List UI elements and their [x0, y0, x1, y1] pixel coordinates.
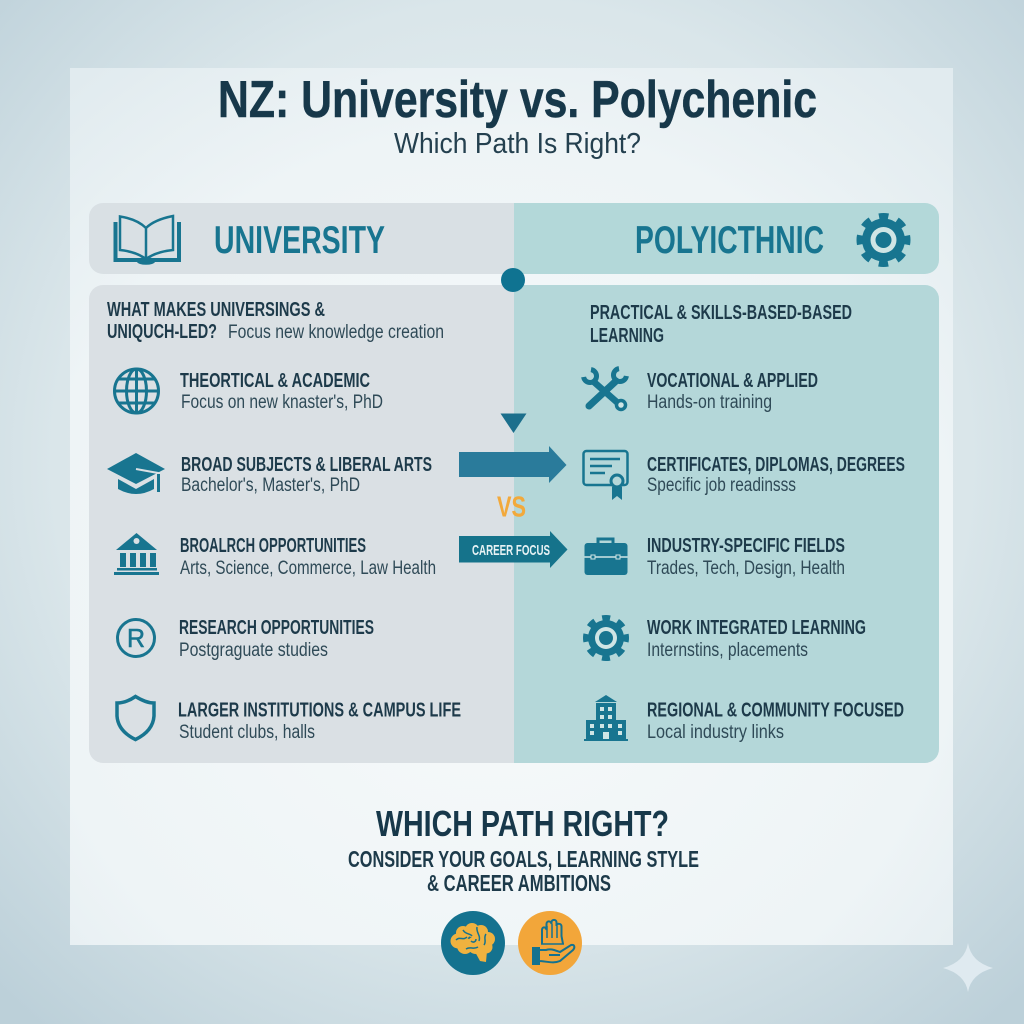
down triangle marker: [500, 414, 526, 433]
intro heading: university: WHAT MAKES UNIVERSINGS &: [107, 299, 325, 321]
closing text: CONSIDER YOUR GOALS, LEARNING STYLE: [348, 846, 699, 872]
item: industry fields: INDUSTRY-SPECIFIC FIELDS: [647, 535, 845, 557]
item: broad subjects: BROAD SUBJECTS & LIBERAL ARTS: [181, 454, 432, 476]
item: theoretical: [114, 369, 383, 413]
item: broad opportunities: [114, 533, 436, 579]
icon: globe: [114, 369, 158, 413]
item: vocational: Hands-on training: [647, 392, 772, 413]
item: broad subjects: Bachelor's, Master's, PhD: [181, 475, 360, 496]
intro heading: polytechnic: [590, 302, 852, 347]
closing text: [348, 846, 699, 896]
item: certificates: CERTIFICATES, DIPLOMAS, DEGREES: [647, 454, 905, 476]
icon: raised hand: [518, 911, 582, 975]
icon: shield: [117, 696, 154, 740]
closing text: & CAREER AMBITIONS: [427, 870, 611, 896]
item: regional: [584, 695, 904, 743]
closing heading: WHICH PATH RIGHT?: [376, 803, 669, 844]
item: broad opportunities: BROALRCH OPPORTUNITIES: [180, 535, 366, 557]
panel: university header: [89, 203, 514, 274]
item: vocational: [584, 369, 818, 413]
intro heading: polytechnic: LEARNING: [590, 325, 664, 347]
icon: graduation cap: [107, 453, 165, 494]
item: broad subjects: [107, 453, 432, 496]
vs label: VS: [497, 492, 526, 524]
icon: sparkle: [943, 943, 993, 992]
item: larger institutions: Student clubs, halls: [179, 722, 315, 743]
panel: polytechnic details: [514, 285, 939, 763]
icon: registered circle: [118, 620, 154, 656]
divider dot: [501, 268, 525, 292]
icon: registered circle: R: [127, 623, 145, 653]
heading: university: UNIVERSITY: [214, 219, 385, 262]
item: industry fields: [584, 535, 845, 579]
subtitle: Which Path Is Right?: [394, 128, 641, 160]
item: larger institutions: [117, 696, 461, 743]
icon: office building: [584, 695, 628, 741]
panel: university details: [89, 285, 514, 763]
item: vocational: VOCATIONAL & APPLIED: [647, 370, 818, 392]
item: regional: Local industry links: [647, 722, 784, 743]
item: certificates: [584, 451, 905, 500]
item: research: [118, 617, 374, 661]
icon: certificate: [584, 451, 628, 500]
intro heading: polytechnic: PRACTICAL & SKILLS-BASED-BASED: [590, 302, 852, 324]
icon: institution building: [114, 533, 159, 575]
item: regional: REGIONAL & COMMUNITY FOCUSED: [647, 700, 904, 722]
panel: polytechnic header: [514, 203, 939, 274]
intro heading: university: [107, 299, 444, 343]
item: theoretical: Focus on new knaster's, PhD: [181, 392, 383, 413]
item: research: RESEARCH OPPORTUNITIES: [179, 617, 374, 639]
icon: gear: [860, 216, 908, 264]
item: work integrated learning: WORK INTEGRATED LEARNING: [647, 617, 866, 639]
intro heading: university: UNIQUCH-LED?: [107, 321, 217, 343]
heading: polytechnic: POLYICTHNIC: [635, 219, 824, 262]
arrow: career focus: [459, 531, 568, 568]
icon: brain: [441, 911, 505, 975]
item: work integrated learning: [586, 617, 866, 661]
item: theoretical: THEORTICAL & ACADEMIC: [180, 370, 370, 392]
arrow: career focus: CAREER FOCUS: [472, 542, 550, 559]
icon: gear: [586, 618, 626, 658]
title: NZ: University vs. Polychenic: [218, 71, 817, 129]
item: broad opportunities: Arts, Science, Commerce, Law Health: [180, 558, 436, 579]
item: industry fields: Trades, Tech, Design, Health: [647, 558, 845, 579]
item: larger institutions: LARGER INSTITUTIONS & CAMPUS LIFE: [178, 700, 461, 722]
icon: open book: [116, 216, 179, 264]
icon: crossed wrenches: [584, 369, 626, 410]
item: certificates: Specific job readinsss: [647, 475, 796, 496]
arrow: comparison: [459, 446, 566, 483]
intro heading: university: Focus new knowledge creation: [228, 322, 444, 343]
main card: [70, 68, 953, 945]
icon: briefcase: [584, 539, 628, 575]
item: work integrated learning: Internstins, placements: [647, 640, 808, 661]
item: research: Postgraguate studies: [179, 640, 328, 661]
